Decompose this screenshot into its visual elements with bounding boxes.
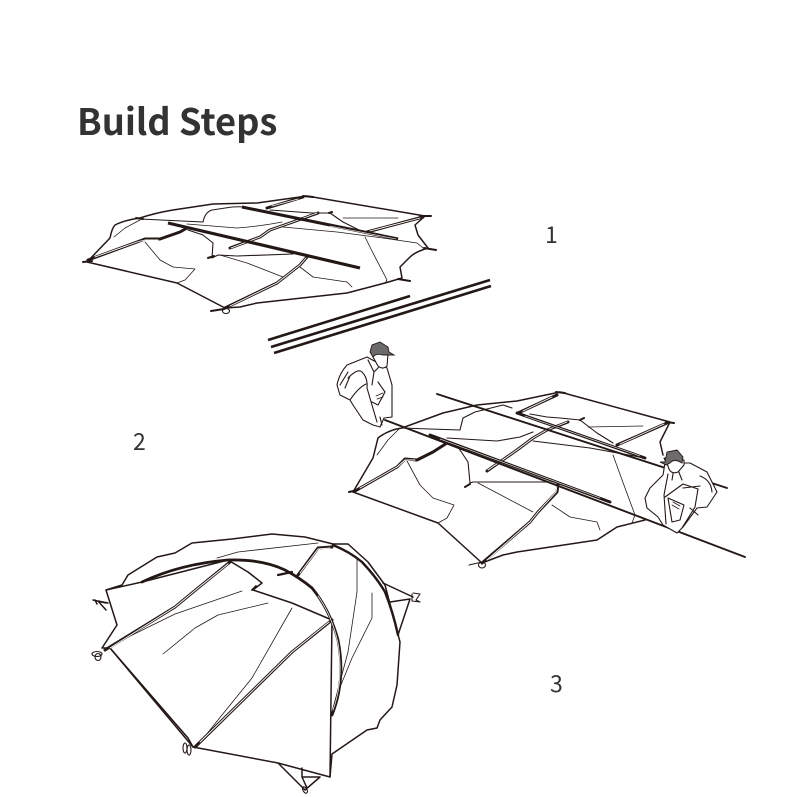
figure: worker left [337,342,394,427]
illustration: step 3 assembled dome tent [92,534,420,794]
title: Build Steps [77,94,277,146]
illustration: three loose poles [268,280,491,353]
step number 3: 3 [550,665,563,699]
step number 2: 2 [133,423,146,457]
illustration: step 2 tent with poles threaded [337,342,745,568]
figure: worker right [645,450,717,533]
illustration: step 1 tent laid flat with poles [83,196,436,314]
step number 1: 1 [545,216,558,250]
